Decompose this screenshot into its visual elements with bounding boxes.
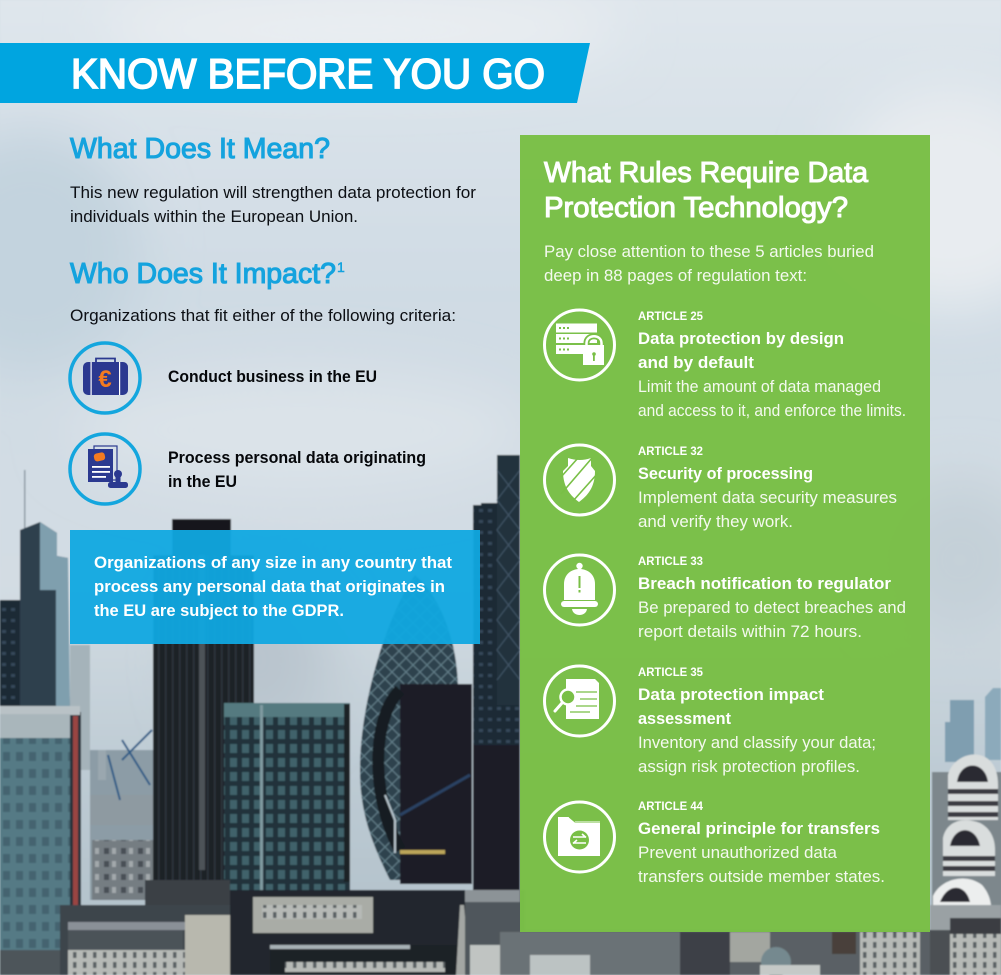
panel heading: What Rules Require Data	[544, 157, 869, 189]
article 32: and verify they work.	[638, 512, 793, 531]
far towers, right	[945, 700, 974, 762]
article 44: General principle for transfers	[638, 819, 880, 838]
callout: GDPR scope: Organizations of any size in any country that	[94, 553, 452, 572]
criteria intro: Organizations that fit either of the following criteria:	[70, 306, 456, 325]
icon: folder with transfer arrows	[544, 802, 614, 872]
article 44	[638, 799, 885, 886]
right dark tower	[473, 455, 520, 900]
article 32: Implement data security measures	[638, 488, 897, 507]
article 44: transfers outside member states.	[638, 867, 885, 886]
article 25: ARTICLE 25	[638, 309, 703, 323]
icon: striped shield	[544, 445, 614, 515]
left towers	[24, 470, 26, 532]
panel intro: Pay close attention to these 5 articles buried	[544, 242, 874, 261]
callout: GDPR scope	[70, 530, 480, 644]
article 25: and by default	[638, 353, 754, 372]
article 44: Prevent unauthorized data	[638, 843, 838, 862]
section: what does it mean	[70, 133, 476, 226]
article 25	[638, 309, 906, 420]
icon: briefcase with euro: €	[98, 366, 112, 393]
panel intro	[544, 242, 874, 285]
article 44: ARTICLE 44	[638, 799, 703, 813]
arched towers	[948, 754, 998, 820]
article 35: assign risk protection profiles.	[638, 757, 860, 776]
gherkin	[360, 575, 470, 880]
article 35: Data protection impact	[638, 685, 824, 704]
icon: document with magnifier	[544, 666, 614, 736]
body text: This new regulation will strengthen data protection for	[70, 183, 476, 202]
black tower	[172, 519, 231, 559]
low-rise foreground	[0, 950, 230, 975]
teal office block	[224, 703, 350, 903]
distant cranes and low city	[90, 750, 154, 900]
body text: individuals within the European Union.	[70, 207, 358, 226]
heading: What Does It Mean?	[70, 133, 330, 165]
article 25: Limit the amount of data managed	[638, 377, 881, 396]
article 32: ARTICLE 32	[638, 444, 703, 458]
title: KNOW BEFORE YOU GO	[71, 50, 545, 97]
icon: briefcase with euro	[70, 343, 140, 413]
callout: GDPR scope: the EU are subject to the GDPR.	[94, 601, 344, 620]
panel intro: deep in 88 pages of regulation text:	[544, 266, 807, 285]
article 33: Be prepared to detect breaches and	[638, 598, 906, 617]
article 25: Data protection by design	[638, 329, 844, 348]
heading: Who Does It Impact?	[70, 258, 336, 290]
article 33: Breach notification to regulator	[638, 574, 891, 593]
article 35: Inventory and classify your data;	[638, 733, 876, 752]
panel heading: Protection Technology?	[544, 192, 848, 224]
body text	[70, 183, 476, 226]
callout: GDPR scope: process any personal data that originates in	[94, 577, 445, 596]
icon: server with padlock	[544, 310, 614, 380]
article 33	[638, 554, 906, 641]
panel heading	[544, 157, 869, 224]
article 25: and access to it, and enforce the limits.	[638, 401, 906, 420]
article 35	[638, 665, 876, 776]
criterion: conduct business: Conduct business in the EU	[168, 367, 377, 386]
heading: 1	[337, 259, 345, 275]
article 33: ARTICLE 33	[638, 554, 703, 568]
criterion: process personal data: Process personal data originating	[168, 448, 426, 467]
criterion: process personal data	[168, 448, 426, 491]
title banner	[0, 43, 590, 103]
panel: rules requiring data protection technology	[520, 135, 930, 932]
article 35: ARTICLE 35	[638, 665, 703, 679]
icon: document with stamp	[70, 434, 140, 504]
glass foreground block	[70, 712, 81, 918]
article 32	[638, 444, 897, 531]
icon: alert bell	[544, 555, 614, 625]
article 33: report details within 72 hours.	[638, 622, 862, 641]
article 35: assessment	[638, 709, 731, 728]
section: who does it impact	[70, 258, 456, 504]
criterion: process personal data: in the EU	[168, 472, 237, 491]
article 32: Security of processing	[638, 464, 813, 483]
